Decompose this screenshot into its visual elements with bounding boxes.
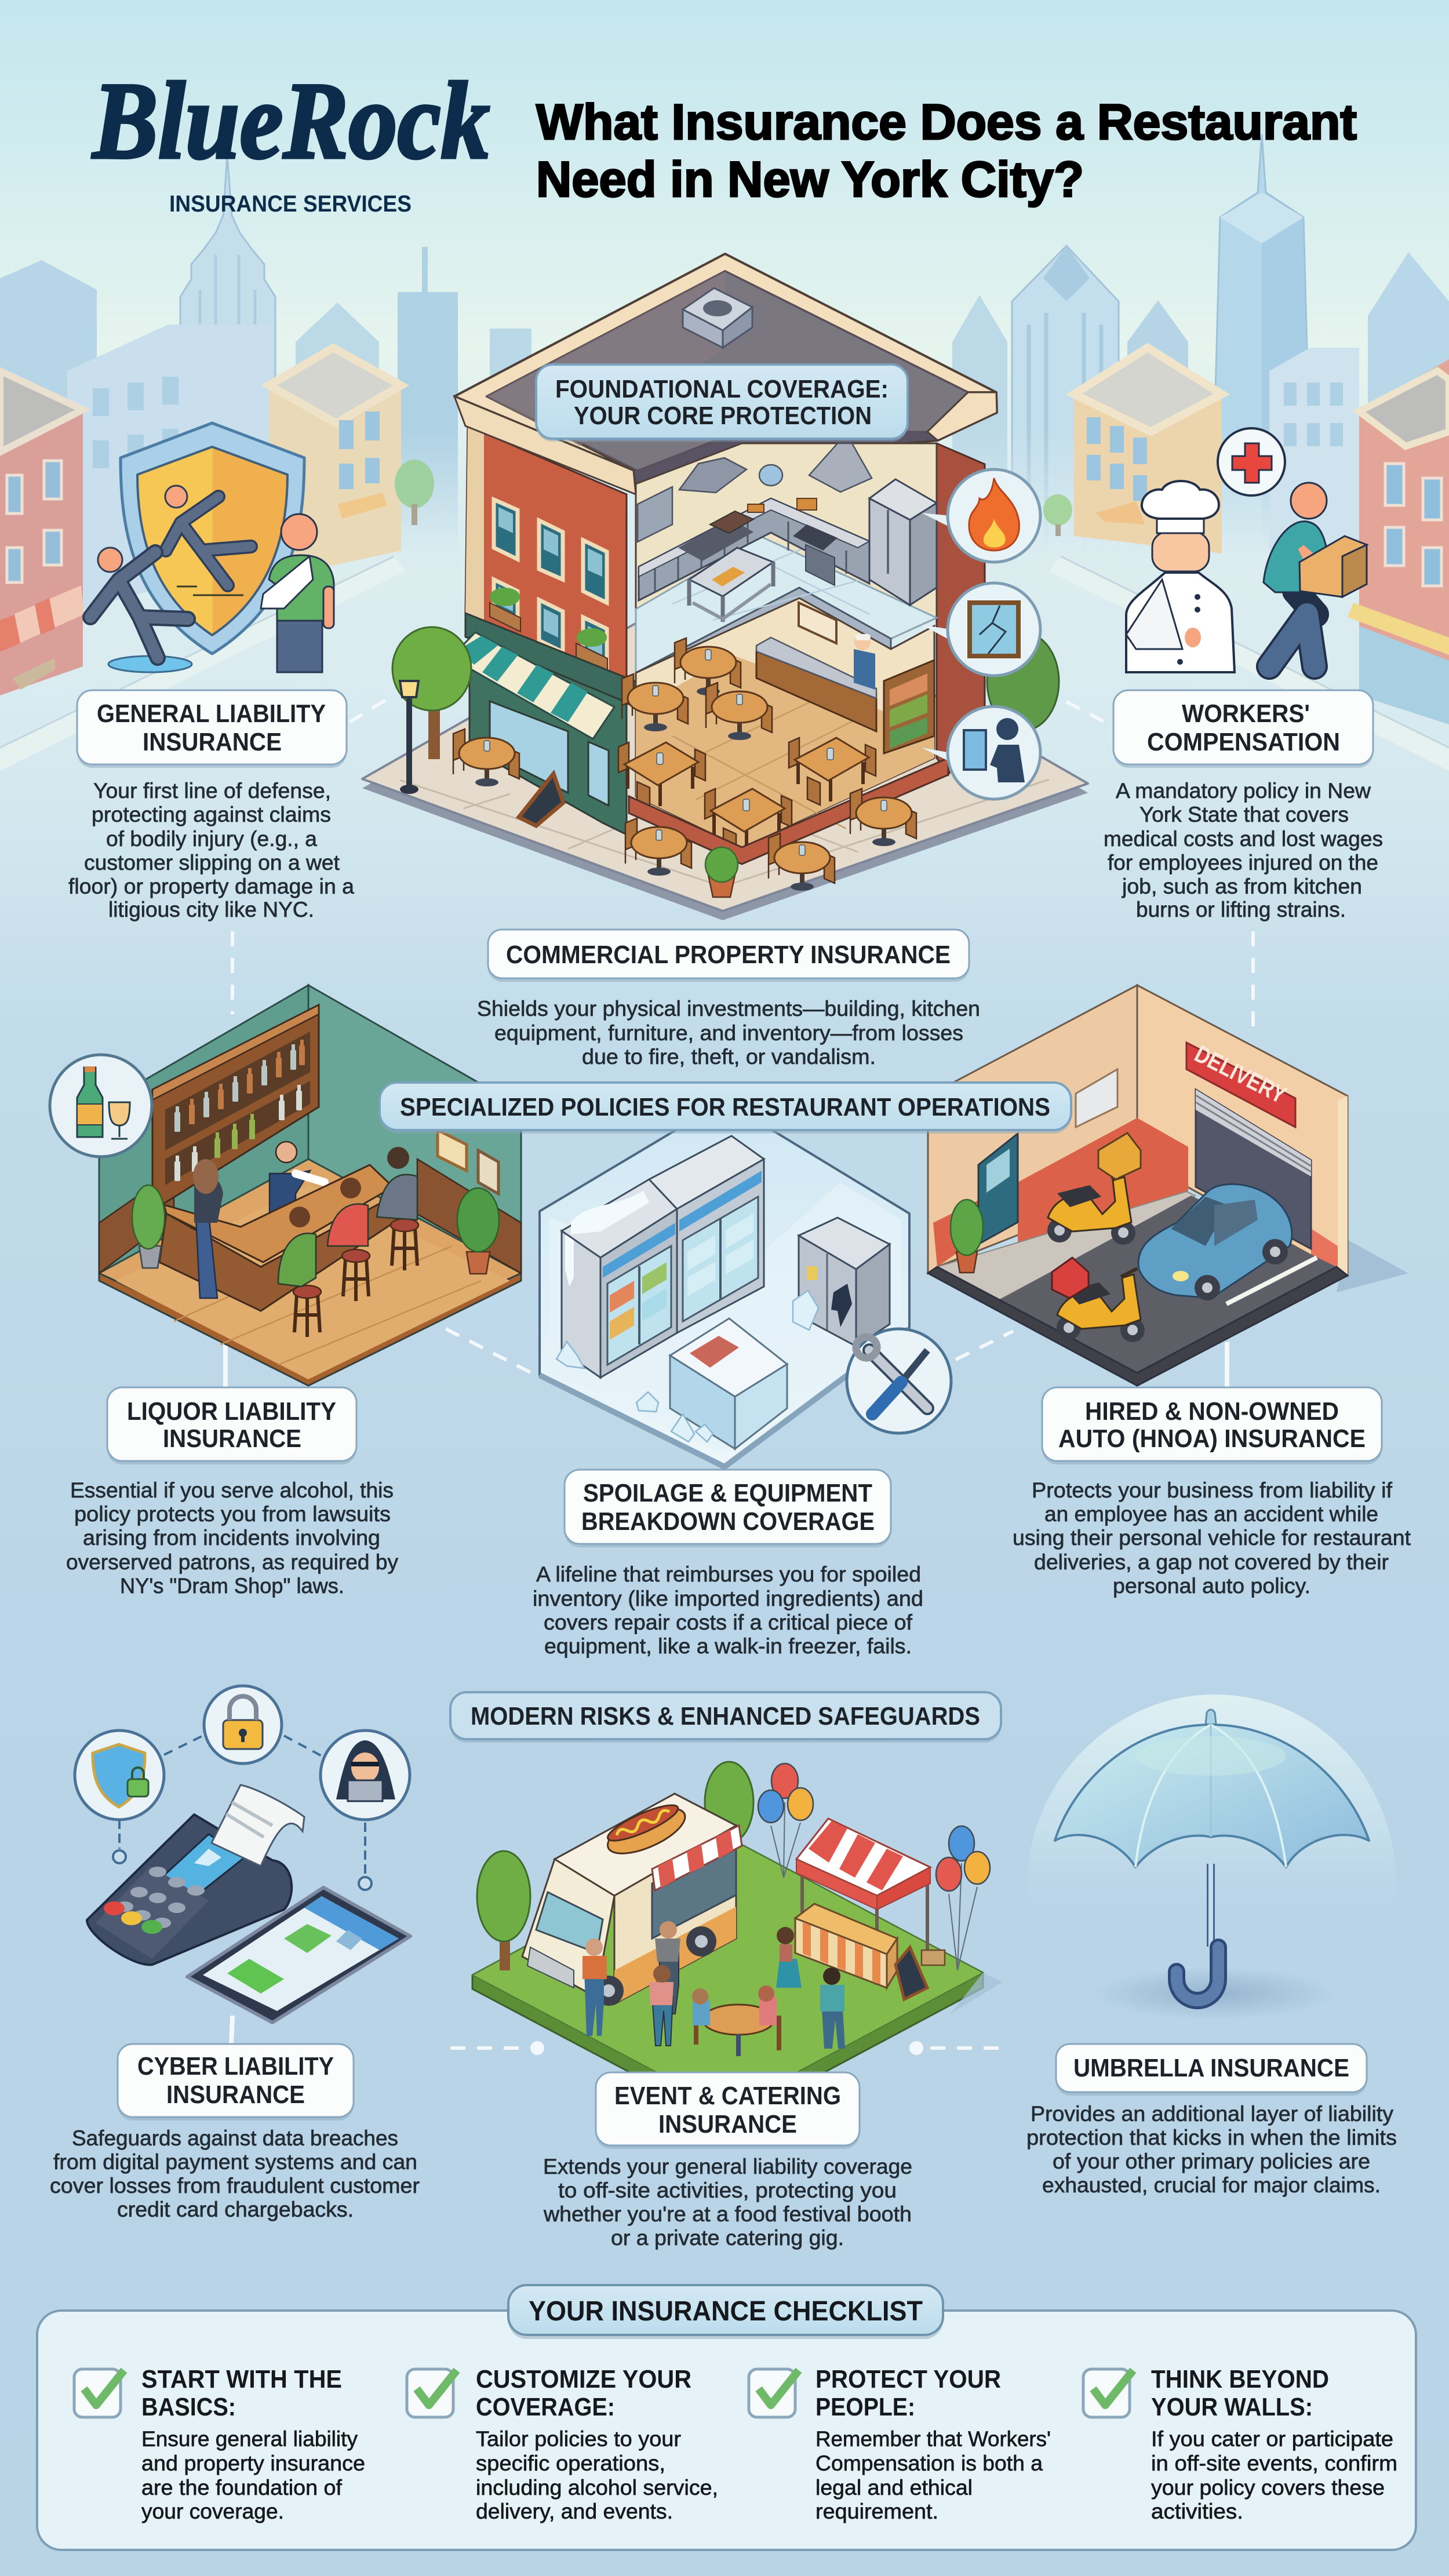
text: event and catering description: or a private catering gig. [611,2226,844,2250]
food truck [522,1794,742,2006]
text: HNOA description: an employee has an accident while [1044,1502,1378,1526]
festival people [582,1921,845,2049]
text: spoilage description: A lifeline that reimburses you for spoiled [536,1562,921,1586]
text: umbrella description: Provides an additional layer of liability [1031,2102,1393,2126]
chalkboard sign [519,774,563,826]
bar counter [159,1165,402,1311]
potted plant [705,847,738,897]
text: umbrella description: protection that kicks in when the limits [1026,2126,1397,2149]
ice chunks [556,1291,818,1442]
front half wall [629,758,948,864]
heading: modern risks [450,1692,1001,1743]
car [1138,1184,1292,1300]
icon: fire risk [922,469,1040,562]
label: liquor liability insurance [107,1387,356,1464]
heading: foundational coverage: FOUNDATIONAL COVERAGE: [555,375,889,403]
icon: shield with padlock [75,1730,164,1820]
label: spoilage and equipment breakdown [565,1470,891,1547]
garage door [1196,1090,1311,1249]
label: hired and non-owned auto: HIRED & NON-OWNED [1085,1397,1339,1426]
illustration: slip and fall shield [90,423,334,672]
text: workers' compensation description: burns or lifting strains. [1136,898,1346,921]
heading: modern risks: MODERN RISKS & ENHANCED SAFEGUARDS [471,1702,980,1730]
wall frames [438,1130,498,1194]
text: spoilage description: equipment, like a walk-in freezer, fails. [544,1634,912,1658]
text: commercial property description [477,997,980,1069]
trees [477,1762,753,1970]
worker lifting box [1264,483,1367,666]
text: commercial property description: equipment, furniture, and inventory—from losses [494,1021,963,1045]
text: general liability description: of bodily injury (e.g., a [106,827,317,851]
heading: specialized policies: SPECIALIZED POLICIES FOR RESTAURANT OPERATIONS [400,1093,1050,1121]
label: general liability insurance: INSURANCE [143,728,282,756]
text: cyber liability description: from digital payment systems and can [53,2150,417,2174]
floor [928,1192,1348,1386]
patrons and stools [193,1147,418,1337]
text: cyber liability description: cover losses from fraudulent customer [50,2174,420,2198]
checklist item: protect your people: requirement. [815,2500,938,2523]
checklist item: customize your coverage: delivery, and events. [476,2500,673,2523]
background: left city buildings [0,325,434,695]
panel: insurance checklist [37,2285,1416,2550]
label: commercial property insurance: COMMERCIAL PROPERTY INSURANCE [506,941,951,969]
illustration: restaurant building cutaway [362,254,1088,920]
bartender [270,1142,325,1229]
chest freezer [670,1318,787,1449]
sidewalk platform [362,574,1088,920]
checklist item: customize your coverage: COVERAGE: [476,2393,615,2421]
logo [92,60,490,217]
text: event and catering description [543,2155,912,2250]
text: umbrella description: exhausted, crucial for major claims. [1042,2173,1381,2197]
tree behind right side [987,632,1059,731]
background: distant skyline [0,134,1449,568]
checklist item: think beyond your walls: YOUR WALLS: [1151,2393,1313,2421]
illustration: injured workers [1126,428,1367,672]
text: workers' compensation description: job, such as from kitchen [1122,875,1362,898]
checklist item: protect your people: PEOPLE: [815,2393,915,2421]
text: cyber liability description [50,2126,420,2221]
storefront [465,613,636,835]
text: general liability description: Your first line of defense, [93,779,331,803]
icon: wrench and screwdriver [847,1329,951,1433]
label: spoilage and equipment breakdown: SPOILAGE & EQUIPMENT [583,1479,872,1507]
checklist item: think beyond your walls: If you cater or participate [1151,2427,1393,2451]
card terminal [87,1785,304,1965]
title [536,94,1357,207]
icon: person with tablet [922,706,1040,799]
label: workers' compensation: WORKERS' [1182,699,1310,728]
heading: specialized policies [380,1083,1071,1134]
text: commercial property description: due to fire, theft, or vandalism. [582,1045,876,1069]
checklist item: protect your people: Remember that Workers' [815,2427,1051,2451]
text: cyber liability description: credit card chargebacks. [117,2198,354,2221]
picnic table [692,1985,781,2056]
text: spoilage description: inventory (like imported ingredients) and [533,1587,923,1611]
smartphone [187,1888,410,2023]
hot dog on roof [601,1798,691,1863]
illustration: delivery garage [928,985,1408,1386]
injured person with sling [261,514,334,672]
label: liquor liability insurance: INSURANCE [163,1424,301,1453]
street lamp [400,681,418,794]
text: umbrella description [1026,2102,1397,2197]
illustration: payment terminal [75,1686,410,2023]
background: street level [0,429,1449,1043]
text: liquor liability description: arising from incidents involving [83,1526,380,1550]
text: liquor liability description: Essential if you serve alcohol, this [70,1478,394,1502]
label: cyber liability insurance [118,2044,354,2120]
label: cyber liability insurance: CYBER LIABILITY [137,2052,334,2081]
right brick wall [937,443,985,775]
upper floor: kitchen [636,443,937,684]
text: general liability description: customer slipping on a wet [84,851,340,875]
checklist item: start with the basics [74,2365,365,2523]
checklist item: start with the basics: BASICS: [141,2393,236,2421]
checklist item: think beyond your walls: activities. [1151,2500,1243,2523]
chef with sling [1126,481,1235,672]
illustration: bar interior [50,985,521,1386]
background: right city buildings [1043,348,1449,724]
icon: medical cross [1218,428,1285,495]
label: liquor liability insurance: LIQUOR LIABILITY [127,1397,336,1426]
back bar shelving [152,1005,319,1205]
text: workers' compensation description [1104,779,1383,921]
market stall [795,1819,945,1999]
label: workers' compensation [1113,690,1373,768]
roof [454,254,997,494]
text: liquor liability description: overserved patrons, as required by [66,1550,398,1574]
display freezers [562,1136,764,1378]
text: HNOA description: deliveries, a gap not covered by their [1034,1550,1389,1574]
outdoor tables [453,729,916,891]
checklist item: think beyond your walls [1083,2365,1397,2523]
checklist item: start with the basics: are the foundation of [141,2476,343,2500]
text: spoilage description [533,1562,923,1658]
checklist item: start with the basics: Ensure general liability [141,2427,358,2451]
label: umbrella insurance [1056,2044,1367,2096]
title: What Insurance Does a Restaurant [536,94,1357,150]
label: event and catering insurance: EVENT & CATERING [614,2082,841,2110]
checklist item: start with the basics: START WITH THE [141,2365,342,2393]
text: commercial property description: Shields your physical investments—building, kitchen [477,997,980,1021]
text: spoilage description: covers repair costs if a critical piece of [544,1611,913,1634]
illustration: freezer room [540,1101,951,1467]
heading: your insurance checklist [508,2285,943,2339]
left brick facade [454,396,636,690]
label: commercial property insurance [488,930,969,982]
text: general liability description: protecting against claims [92,803,331,826]
label: general liability insurance [77,690,347,768]
label: workers' compensation: COMPENSATION [1147,728,1340,756]
checklist item: protect your people: legal and ethical [815,2476,973,2500]
awning [451,632,614,739]
checklist item: customize your coverage: CUSTOMIZE YOUR [476,2365,691,2393]
icon: bottle and glass [50,1055,152,1157]
illustration: umbrella [1027,1695,1397,2020]
text: event and catering description: whether you're at a food festival booth [543,2202,912,2226]
potted plants [132,1185,499,1274]
delivery sign: DELIVERY [1190,1040,1291,1109]
checklist item: start with the basics: and property insurance [141,2451,365,2475]
checklist item: start with the basics: your coverage. [141,2500,284,2523]
label: spoilage and equipment breakdown: BREAKDOWN COVERAGE [581,1507,875,1536]
text: cyber liability description: Safeguards against data breaches [72,2126,398,2150]
network links [113,1736,372,1890]
text: workers' compensation description: York State that covers [1139,803,1349,826]
label: general liability insurance: GENERAL LIABILITY [97,699,326,728]
heading: foundational coverage [536,365,908,442]
text: general liability description [68,779,354,921]
illustration: food truck festival [472,1762,1003,2124]
checklist item: customize your coverage: specific operations, [476,2451,665,2475]
heading: your insurance checklist: YOUR INSURANCE CHECKLIST [529,2296,923,2327]
text: liquor liability description: policy protects you from lawsuits [74,1502,391,1526]
label: umbrella insurance: UMBRELLA INSURANCE [1073,2054,1349,2082]
heading: foundational coverage: YOUR CORE PROTECTION [574,402,872,430]
text: liquor liability description [66,1478,398,1598]
label: hired and non-owned auto [1042,1387,1382,1464]
logo wordmark: BlueRock [92,60,490,182]
label: hired and non-owned auto: AUTO (HNOA) INSURANCE [1058,1424,1366,1453]
text: HNOA description: personal auto policy. [1113,1574,1310,1598]
checklist item: protect your people [749,2365,1051,2523]
label: cyber liability insurance: INSURANCE [166,2081,305,2109]
checklist item: protect your people: PROTECT YOUR [815,2365,1001,2393]
text: workers' compensation description: for employees injured on the [1108,851,1378,875]
left tree [392,627,471,759]
text: event and catering description: Extends your general liability coverage [543,2155,912,2178]
label: event and catering insurance: INSURANCE [658,2110,797,2138]
text: general liability description: litigious city like NYC. [108,898,314,921]
icon: hacker [321,1730,410,1820]
text: umbrella description: of your other primary policies are [1053,2149,1370,2173]
text: workers' compensation description: medical costs and lost wages [1104,827,1383,851]
grass platform [472,1837,1003,2124]
checklist item: protect your people: Compensation is both a [815,2451,1043,2475]
text: HNOA description [1013,1478,1411,1598]
balloons [758,1764,990,1970]
delivery scooters [1047,1133,1145,1342]
checklist item: think beyond your walls: THINK BEYOND [1151,2365,1329,2393]
broken refrigerator [799,1218,890,1346]
checklist item: customize your coverage [407,2365,718,2523]
icon: broken window [922,583,1040,676]
connector lines [225,698,1253,2055]
text: HNOA description: Protects your business from liability if [1032,1478,1393,1502]
icon: padlock [204,1686,282,1764]
label: event and catering insurance [596,2072,860,2149]
title: Need in New York City? [536,152,1084,207]
checklist item: think beyond your walls: in off-site events, confirm [1151,2451,1397,2475]
checklist item: customize your coverage: Tailor policies to your [476,2427,681,2451]
door and plant [951,1069,1117,1273]
text: liquor liability description: NY's "Dram Shop" laws. [120,1574,344,1598]
text: workers' compensation description: A mandatory policy in New [1116,779,1371,803]
lower floor: dining room [618,598,934,856]
text: HNOA description: using their personal vehicle for restaurant [1013,1526,1411,1550]
logo subtitle: INSURANCE SERVICES [169,191,412,217]
rooftop AC unit [683,288,752,348]
checklist item: customize your coverage: including alcohol service, [476,2476,718,2500]
text: general liability description: floor) or property damage in a [68,875,354,898]
text: event and catering description: to off-site activities, protecting you [558,2178,897,2202]
checklist item: think beyond your walls: your policy covers these [1151,2476,1385,2500]
